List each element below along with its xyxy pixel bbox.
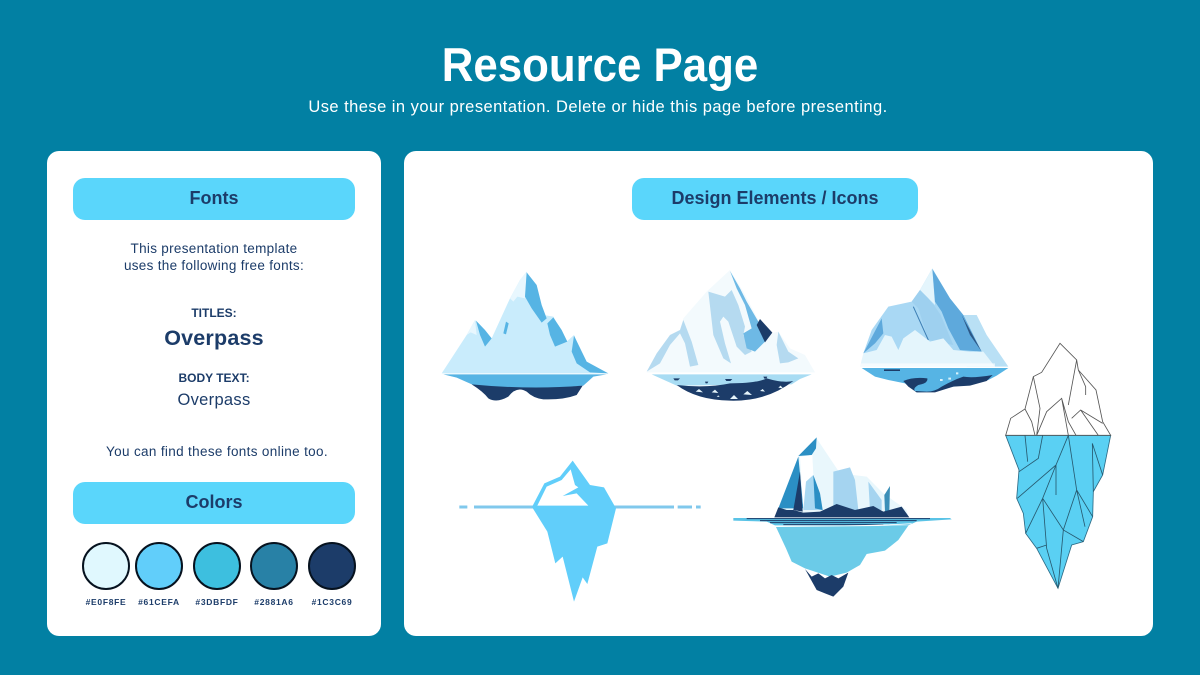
icon: flat iceberg with waterline bbox=[459, 461, 701, 602]
swatch: 61CEFA bbox=[135, 542, 183, 590]
label: 2881A6: #2881A6 bbox=[254, 597, 294, 607]
text block: fonts intro: This presentation template bbox=[131, 241, 297, 256]
text block: fonts intro bbox=[124, 241, 304, 273]
subtitle: Use these in your presentation. Delete or hide this page before presenting. bbox=[308, 98, 888, 116]
panel: design elements bbox=[404, 151, 1153, 636]
swatch: 1C3C69 bbox=[308, 542, 356, 590]
label: E0F8FE: #E0F8FE bbox=[86, 597, 126, 607]
text: body font name: Overpass bbox=[177, 391, 250, 409]
icon: outlined iceberg bbox=[1006, 343, 1111, 588]
swatch: 2881A6 bbox=[250, 542, 298, 590]
icon: iceberg 2 bbox=[647, 270, 815, 401]
swatch: E0F8FE bbox=[82, 542, 130, 590]
icon: detailed iceberg with reflection bbox=[733, 437, 952, 597]
heading: fonts bbox=[73, 178, 355, 220]
text: title font name: Overpass bbox=[164, 326, 264, 350]
icon: iceberg 3 bbox=[860, 268, 1008, 392]
icon: iceberg 1 bbox=[442, 272, 608, 400]
panel: fonts and colors bbox=[47, 151, 381, 636]
heading: design elements bbox=[632, 178, 918, 220]
heading: fonts: Fonts bbox=[190, 188, 238, 208]
color swatches bbox=[82, 542, 356, 607]
heading: colors bbox=[73, 482, 355, 524]
text block: fonts note: You can find these fonts online too. bbox=[106, 444, 328, 459]
text block: titles font: TITLES: bbox=[191, 306, 237, 320]
heading: design elements: Design Elements / Icons bbox=[671, 188, 879, 208]
label: 1C3C69: #1C3C69 bbox=[312, 597, 352, 607]
swatch: 3DBFDF bbox=[193, 542, 241, 590]
text block: fonts intro: uses the following free fonts: bbox=[124, 258, 304, 273]
label: 61CEFA: #61CEFA bbox=[138, 597, 180, 607]
label: 3DBFDF: #3DBFDF bbox=[195, 597, 239, 607]
text block: body font label: BODY TEXT: bbox=[178, 371, 250, 385]
heading: colors: Colors bbox=[185, 492, 242, 512]
title: Resource Page bbox=[442, 38, 758, 91]
